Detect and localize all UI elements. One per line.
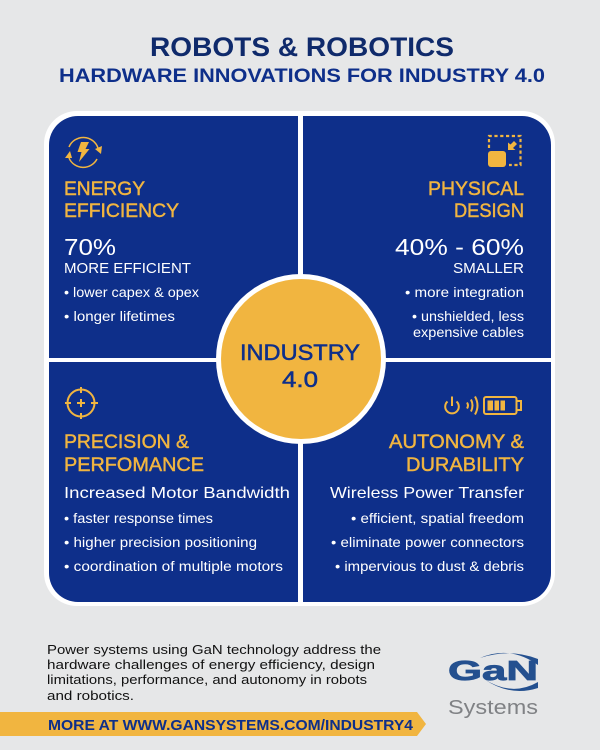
call-to-action banner: MORE AT WWW.GANSYSTEMS.COM/INDUSTRY4 xyxy=(48,717,414,734)
center badge: industry 4.0: INDUSTRY xyxy=(240,340,360,365)
logo: GaN Systems xyxy=(448,653,538,719)
footer description xyxy=(47,642,381,703)
bullet list: • more integration xyxy=(405,285,524,300)
subheading: Increased Motor Bandwidth xyxy=(64,485,290,502)
bullet list xyxy=(64,285,199,324)
heading: autonomy and durability: DURABILITY xyxy=(406,454,524,476)
bullet list xyxy=(331,511,524,574)
heading: physical design: DESIGN xyxy=(454,200,524,222)
title: ROBOTS & ROBOTICS xyxy=(150,32,454,62)
footer description: and robotics. xyxy=(47,688,134,703)
bullet list: • lower capex & opex xyxy=(64,285,199,300)
icon: shrink xyxy=(488,136,520,167)
icon: crosshair xyxy=(65,387,98,419)
panel: energy efficiency xyxy=(49,116,298,358)
heading: precision and performance: PERFOMANCE xyxy=(64,454,204,476)
stat label: MORE EFFICIENT xyxy=(64,260,191,277)
heading: energy efficiency: EFFICIENCY xyxy=(64,200,179,222)
center badge: industry 4.0 xyxy=(216,274,386,444)
footer description: limitations, performance, and autonomy in robots xyxy=(47,672,367,687)
call-to-action banner xyxy=(0,712,426,736)
bullet list: • longer lifetimes xyxy=(64,309,175,324)
subtitle: HARDWARE INNOVATIONS FOR INDUSTRY 4.0 xyxy=(59,65,545,87)
bullet list: • coordination of multiple motors xyxy=(64,559,283,574)
stat: 70%: 70% xyxy=(64,234,116,260)
bullet list xyxy=(64,511,283,574)
heading: autonomy and durability: AUTONOMY & xyxy=(389,431,524,453)
quadrant panel frame xyxy=(44,111,555,606)
heading: precision and performance: PRECISION & xyxy=(64,431,189,453)
logo: GaN Systems: Systems xyxy=(448,697,538,719)
subheading: Wireless Power Transfer xyxy=(330,485,525,502)
footer description: hardware challenges of energy efficiency, design xyxy=(47,657,375,672)
bullet list: • impervious to dust & debris xyxy=(335,559,524,574)
bullet list: • faster response times xyxy=(64,511,213,526)
stat label: SMALLER xyxy=(453,260,524,277)
bullet list: • efficient, spatial freedom xyxy=(351,511,524,526)
icon: energy cycle xyxy=(65,137,102,167)
bullet list: • unshielded, less xyxy=(412,309,524,324)
panel: precision and performance xyxy=(49,362,298,602)
panel: autonomy and durability xyxy=(303,362,551,602)
logo: GaN Systems: GaN xyxy=(448,655,538,686)
bullet list: • eliminate power connectors xyxy=(331,535,524,550)
panel: physical design xyxy=(303,116,551,358)
heading: energy efficiency: ENERGY xyxy=(64,178,145,200)
bullet list: • higher precision positioning xyxy=(64,535,257,550)
bullet list xyxy=(405,285,524,340)
heading: physical design: PHYSICAL xyxy=(428,178,524,200)
stat: 40% - 60%: 40% - 60% xyxy=(395,234,524,260)
center badge: industry 4.0: 4.0 xyxy=(282,367,318,392)
bullet list: expensive cables xyxy=(413,325,524,340)
icon: power and battery xyxy=(445,396,521,414)
footer description: Power systems using GaN technology address the xyxy=(47,642,381,657)
